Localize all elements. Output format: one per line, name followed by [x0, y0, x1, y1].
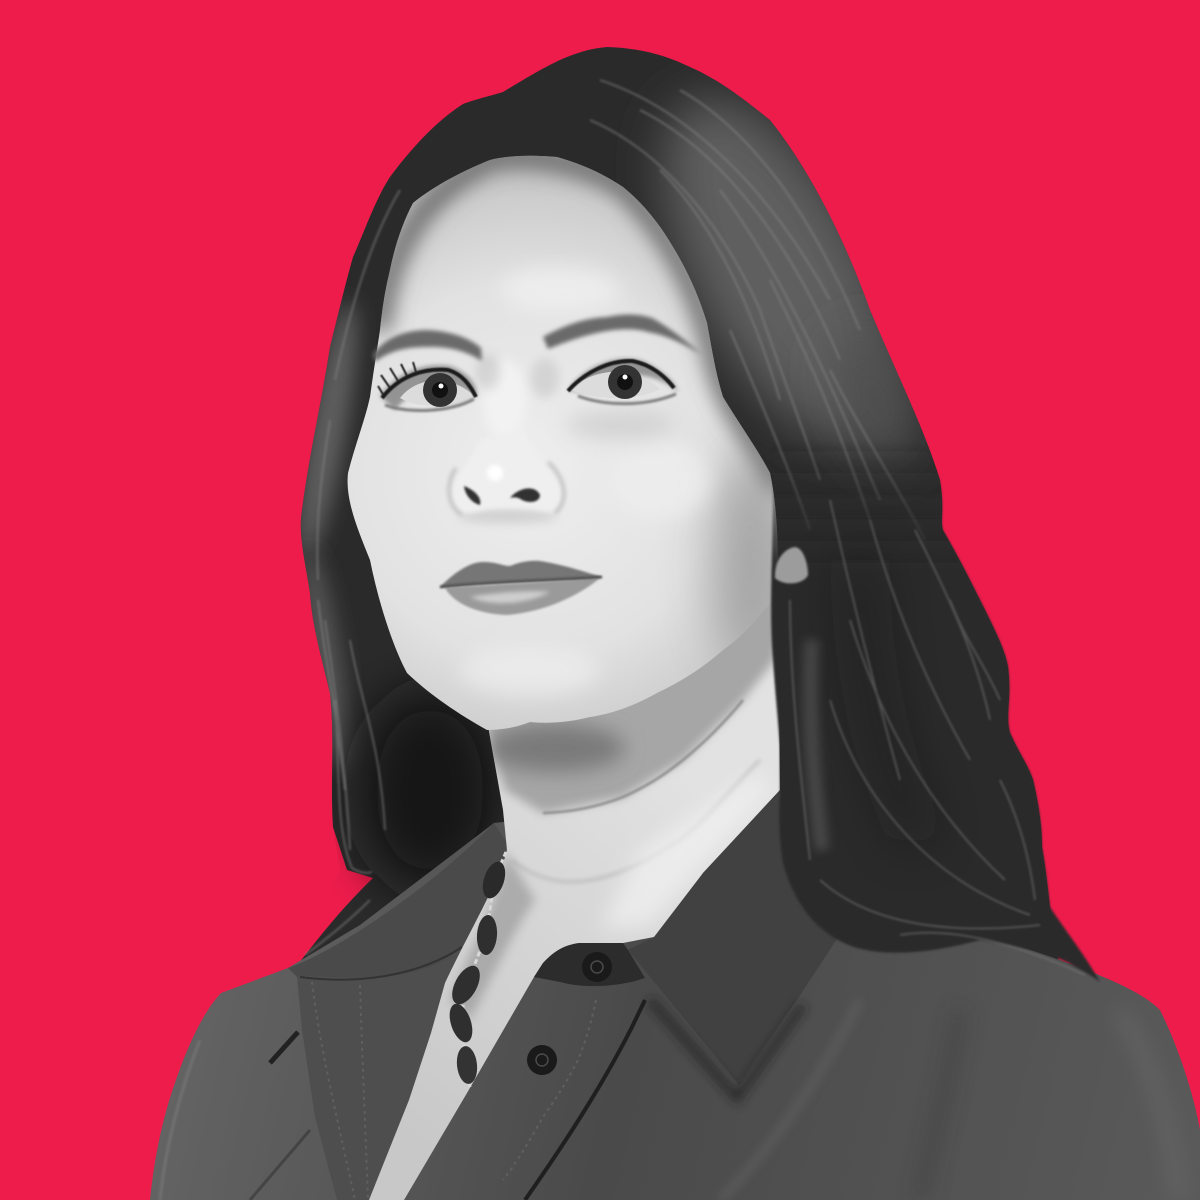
front hair falling over shoulder [771, 440, 1100, 982]
hair top strands [317, 80, 925, 850]
right eyebrow [543, 314, 701, 354]
lips [440, 561, 602, 615]
collar band [534, 943, 645, 986]
neck and chest skin [360, 580, 800, 1200]
left hair highlight strands [305, 600, 385, 955]
face [348, 156, 778, 730]
sleeve seam highlights [160, 1000, 1180, 1200]
shirt front fold line [525, 1000, 645, 1200]
necklace [445, 852, 509, 1087]
left placket [297, 947, 462, 1200]
left collar [288, 823, 507, 978]
hair lower tones and strands [790, 500, 1085, 975]
right eye [568, 359, 678, 404]
right collar [628, 790, 867, 1085]
nose [449, 430, 564, 523]
hair back mass [288, 47, 1060, 975]
shirt body [150, 790, 1200, 1200]
left placket details [270, 947, 462, 1200]
left eyebrow [373, 330, 482, 362]
shirt placket stitching [503, 1000, 596, 1180]
collar shadow on shirt [650, 1000, 803, 1098]
ear [775, 547, 808, 583]
buttons [527, 952, 612, 1075]
left eye [378, 362, 477, 411]
